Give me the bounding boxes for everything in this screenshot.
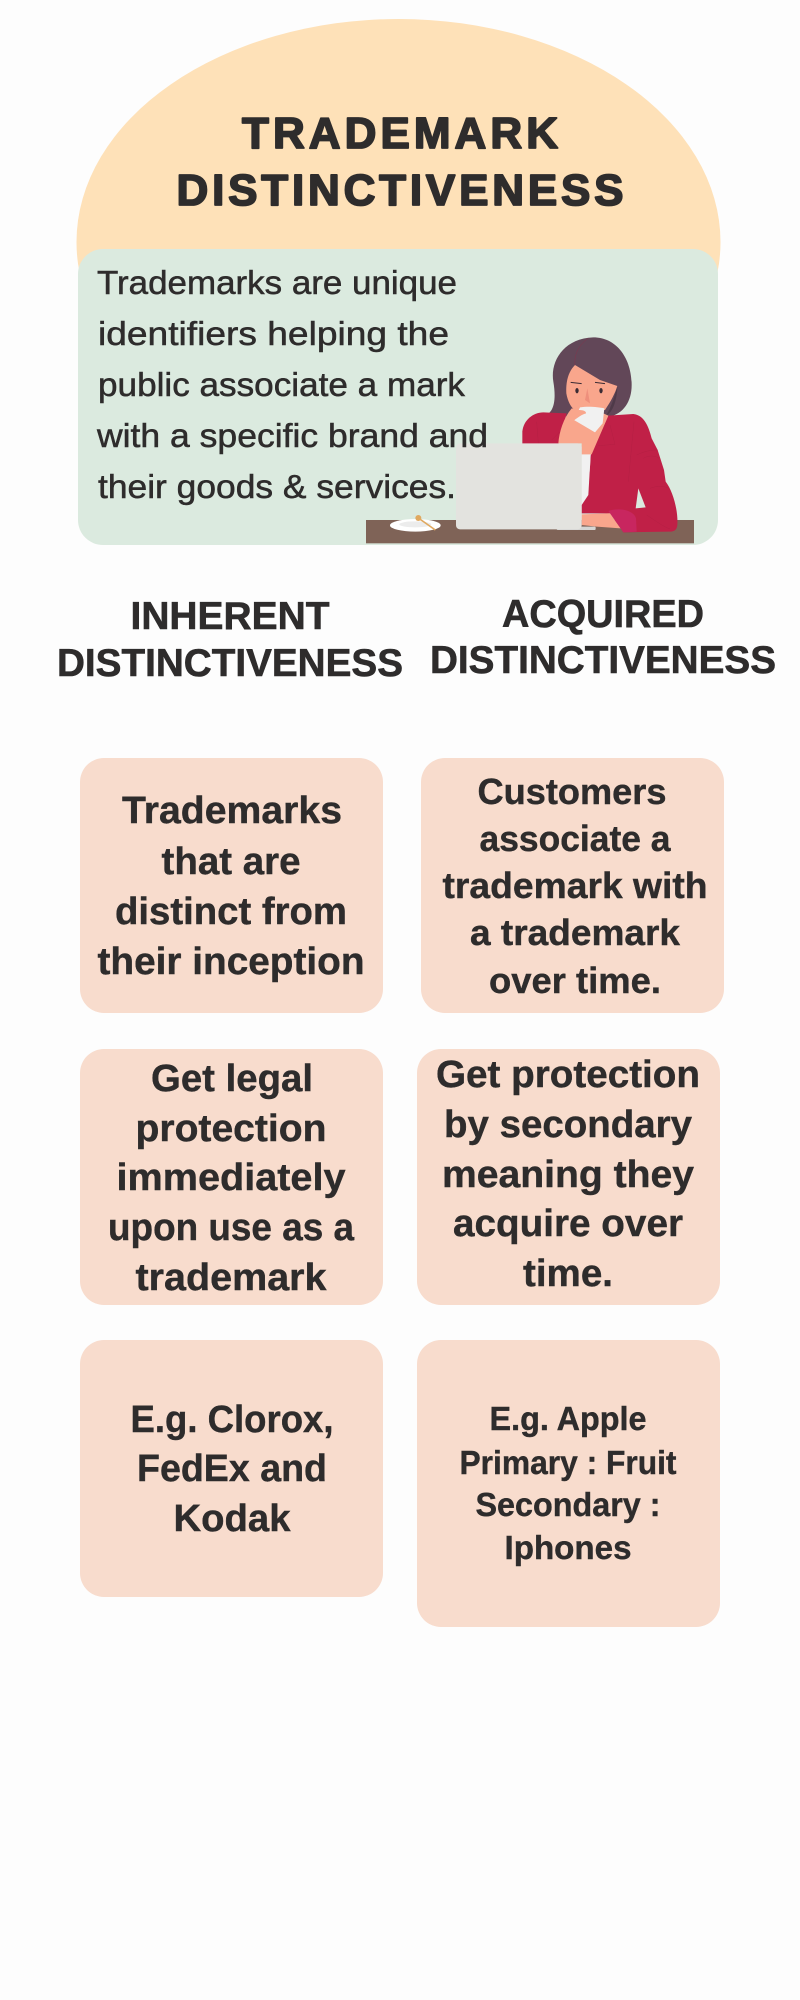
- heading: inherent distinctiveness: DISTINCTIVENESS: [57, 642, 403, 685]
- card: acquired definition: a trademark: [470, 912, 681, 953]
- card: acquired definition: over time.: [489, 960, 661, 1001]
- card: acquired examples: Primary : Fruit: [460, 1444, 677, 1481]
- text block: definition: with a specific brand and: [96, 417, 488, 454]
- card: acquired protection: time.: [523, 1253, 613, 1295]
- text block: definition: identifiers helping the: [98, 315, 449, 352]
- card: inherent examples: FedEx and: [137, 1448, 327, 1490]
- card: acquired definition: Customers: [478, 771, 666, 812]
- card: inherent protection: protection: [136, 1108, 326, 1150]
- card: inherent definition: that are: [162, 841, 300, 883]
- card: inherent definition: distinct from: [115, 891, 347, 933]
- card: inherent protection: [80, 1049, 383, 1305]
- card: acquired definition: associate a: [480, 818, 671, 859]
- card: acquired examples: [417, 1340, 720, 1627]
- card: acquired protection: by secondary: [444, 1104, 692, 1146]
- card: acquired protection: [417, 1049, 720, 1305]
- card: inherent examples: Kodak: [174, 1498, 291, 1540]
- card: inherent protection: Get legal: [151, 1058, 313, 1100]
- card: acquired protection: meaning they: [442, 1154, 694, 1196]
- card: inherent protection: upon use as a: [108, 1207, 355, 1249]
- heading: inherent distinctiveness: INHERENT: [130, 595, 330, 638]
- text block: definition: Trademarks are unique: [97, 264, 457, 301]
- title: DISTINCTIVENESS: [176, 166, 624, 215]
- heading: acquired distinctiveness: ACQUIRED: [502, 593, 704, 636]
- card: acquired examples: E.g. Apple: [490, 1400, 646, 1437]
- heading: acquired distinctiveness: DISTINCTIVENESS: [430, 639, 776, 682]
- title: [176, 109, 624, 215]
- card: acquired protection: Get protection: [436, 1054, 700, 1096]
- card: inherent protection: trademark: [136, 1257, 327, 1299]
- card: acquired examples: Iphones: [504, 1529, 632, 1566]
- panel: definition: [78, 249, 718, 545]
- icon: woman at laptop with cup: [366, 337, 694, 543]
- card: inherent examples: [80, 1340, 383, 1597]
- card: acquired protection: acquire over: [453, 1203, 683, 1245]
- card: acquired examples: Secondary :: [476, 1486, 660, 1523]
- heading: acquired distinctiveness: [430, 593, 776, 682]
- card: inherent examples: E.g. Clorox,: [130, 1399, 334, 1441]
- title: TRADEMARK: [242, 109, 558, 158]
- card: inherent definition: [80, 758, 383, 1013]
- text block: definition: [96, 264, 488, 505]
- card: inherent definition: their inception: [98, 941, 364, 983]
- card: inherent protection: immediately: [116, 1157, 346, 1199]
- card: acquired definition: trademark with: [442, 865, 708, 906]
- card: inherent definition: Trademarks: [122, 790, 342, 832]
- card: acquired definition: [421, 758, 724, 1013]
- header ellipse: [76, 19, 720, 465]
- heading: inherent distinctiveness: [57, 595, 403, 685]
- text block: definition: public associate a mark: [98, 366, 466, 403]
- text block: definition: their goods & services.: [98, 468, 456, 505]
